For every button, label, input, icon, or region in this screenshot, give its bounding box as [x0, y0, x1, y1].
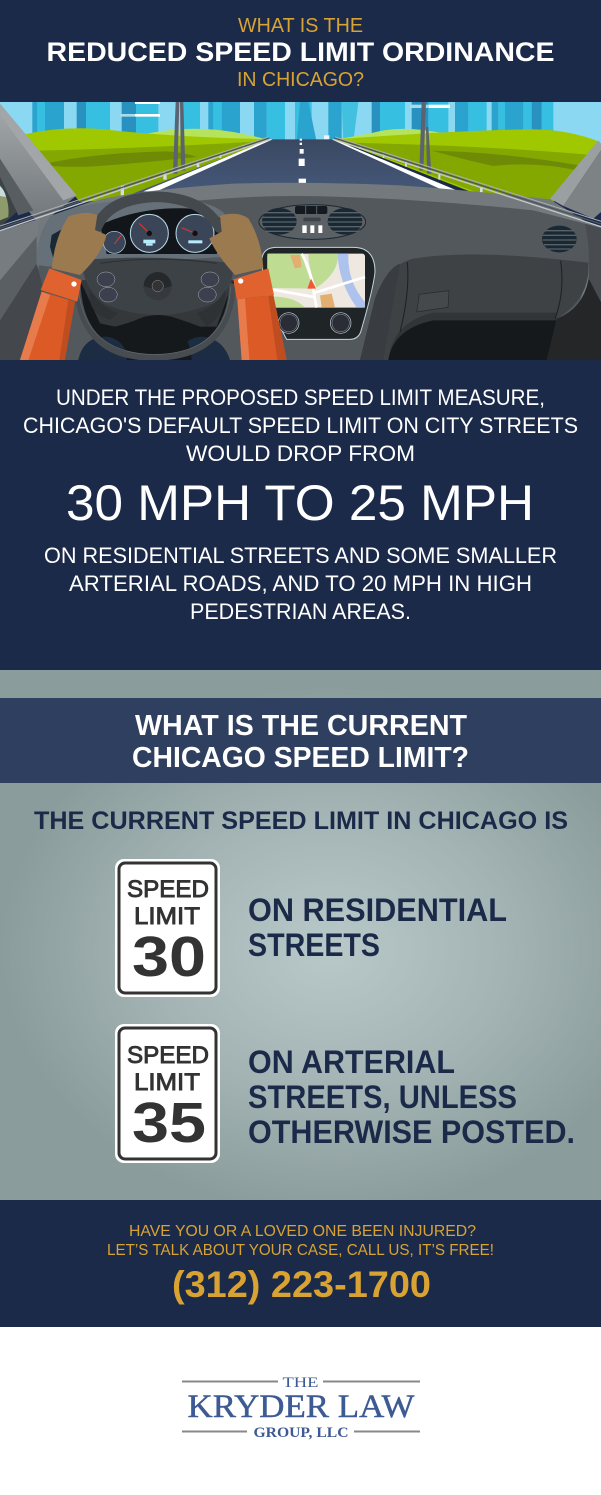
title: REDUCED SPEED LIMIT ORDINANCE [46, 37, 554, 67]
text: arterial streets: OTHERWISE POSTED. [248, 1114, 575, 1150]
subheading: THE CURRENT SPEED LIMIT IN CHICAGO IS [34, 807, 568, 835]
icon: speed limit 30 sign: LIMIT [134, 903, 200, 930]
detail text: ON RESIDENTIAL STREETS AND SOME SMALLER [44, 543, 557, 568]
text: residential streets: STREETS [248, 927, 380, 963]
top navy background [0, 0, 601, 670]
speedometer gauges [103, 214, 214, 253]
panel: call to action: LET’S TALK ABOUT YOUR CASE, CALL US, IT’S FREE! [107, 1242, 494, 1259]
section heading band [0, 698, 601, 783]
road [128, 139, 460, 195]
title: IN CHICAGO? [237, 69, 364, 91]
navigation screen [262, 247, 375, 339]
headline speed change: 30 MPH TO 25 MPH [66, 475, 534, 531]
logo: The Kryder Law Group: THE [282, 1375, 318, 1391]
detail text: ARTERIAL ROADS, AND TO 20 MPH IN HIGH [69, 571, 532, 596]
phone number: (312) 223-1700 [172, 1264, 431, 1305]
icon: speed limit 35 sign [115, 1024, 220, 1163]
title: WHAT IS THE [238, 15, 363, 37]
icon: speed limit 30 sign: 30 [132, 925, 206, 989]
icon: speed limit 35 sign: SPEED [127, 1042, 209, 1069]
steering wheel rim [77, 197, 233, 357]
lower wheel area [75, 258, 235, 360]
panel: call to action [0, 1200, 601, 1327]
text: residential streets [248, 892, 507, 963]
text: arterial streets [248, 1044, 575, 1150]
instrument shroud [37, 198, 230, 267]
guard rails [0, 137, 601, 231]
right windshield pillar [550, 140, 601, 219]
intro text [23, 385, 578, 466]
right air vent [542, 226, 577, 252]
intro text: CHICAGO'S DEFAULT SPEED LIMIT ON CITY STREETS [23, 413, 578, 438]
logo: The Kryder Law Group: KRYDER LAW [188, 1389, 415, 1425]
guard rail posts [121, 145, 483, 195]
centre air vents [259, 205, 366, 239]
left hand and sleeve [20, 213, 107, 360]
panel: current speed limit [0, 670, 601, 1200]
green hills [23, 128, 600, 202]
illustration: driver's view from car [0, 102, 601, 360]
text: residential streets: ON RESIDENTIAL [248, 892, 507, 928]
steering column and cluster [20, 197, 287, 360]
glove box and lower console [360, 254, 601, 360]
text: arterial streets: ON ARTERIAL [248, 1044, 455, 1080]
wheel hub and buttons [97, 272, 219, 302]
section heading band: WHAT IS THE CURRENT [135, 710, 467, 742]
dashboard [0, 183, 601, 360]
sky and city [0, 102, 601, 145]
intro text: UNDER THE PROPOSED SPEED LIMIT MEASURE, [56, 385, 545, 410]
panel: call to action: HAVE YOU OR A LOVED ONE BEEN INJURED? [129, 1223, 476, 1240]
text: arterial streets: STREETS, UNLESS [248, 1079, 517, 1115]
left windshield pillar [0, 104, 77, 227]
icon: speed limit 30 sign: SPEED [127, 876, 209, 903]
logo: The Kryder Law Group: GROUP, LLC [254, 1425, 348, 1441]
right hand and sleeve [209, 214, 287, 360]
intro text: WOULD DROP FROM [186, 441, 415, 466]
title [46, 15, 554, 91]
icon: speed limit 30 sign [115, 859, 220, 997]
detail text: PEDESTRIAN AREAS. [190, 599, 411, 624]
logo: The Kryder Law Group [182, 1375, 420, 1441]
icon: speed limit 35 sign: LIMIT [134, 1069, 200, 1096]
section heading band: CHICAGO SPEED LIMIT? [132, 742, 469, 774]
light poles [173, 102, 431, 174]
detail text [44, 543, 557, 624]
icon: speed limit 35 sign: 35 [132, 1091, 206, 1155]
